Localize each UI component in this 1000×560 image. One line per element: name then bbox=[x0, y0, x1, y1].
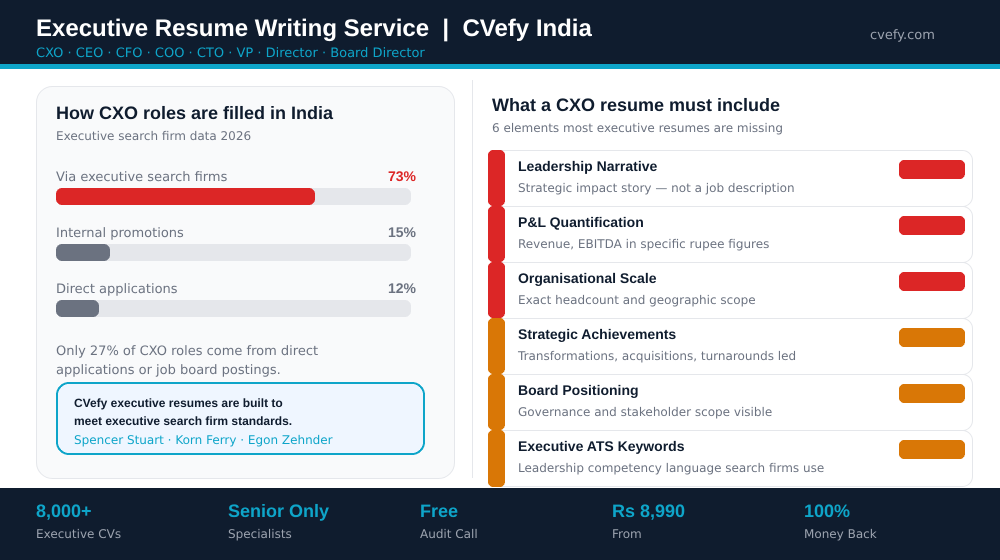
row: Organisational Scale bbox=[488, 262, 972, 318]
callout bbox=[57, 383, 424, 454]
row: Strategic Achievements bbox=[488, 318, 972, 374]
stat: executive CVs bbox=[36, 501, 121, 541]
stat: executive CVs: Executive CVs bbox=[36, 527, 121, 541]
callout: Spencer Stuart · Korn Ferry · Egon Zehnder bbox=[74, 433, 333, 447]
note text bbox=[56, 344, 318, 378]
row: Leadership Narrative bbox=[488, 150, 972, 206]
panel heading: How CXO roles are filled in India bbox=[56, 103, 334, 123]
title: Executive Resume Writing Service | CVefy India bbox=[36, 15, 592, 42]
row: Organisational Scale: Organisational Scale bbox=[518, 270, 657, 286]
stat: money back: Money Back bbox=[804, 527, 877, 541]
right subheading: 6 elements most executive resumes are missing bbox=[492, 121, 783, 135]
bar: executive search firms: 73% bbox=[388, 168, 417, 184]
stat: senior only bbox=[228, 501, 329, 541]
stat: free audit call: Audit Call bbox=[420, 527, 478, 541]
stat: free audit call bbox=[420, 501, 478, 541]
stat: executive CVs: 8,000+ bbox=[36, 501, 92, 521]
row: Organisational Scale: Exact headcount and geographic scope bbox=[518, 293, 756, 307]
row: Leadership Narrative: Strategic impact story — not a job description bbox=[518, 181, 795, 195]
row: Strategic Achievements: Strategic Achievements bbox=[518, 326, 676, 342]
panel: how CXO roles are filled bbox=[36, 86, 454, 478]
bar: internal promotions: Internal promotions bbox=[56, 226, 184, 241]
role list subtitle: CXO · CEO · CFO · COO · CTO · VP · Director · Board Director bbox=[36, 46, 425, 61]
bar: executive search firms: Via executive search firms bbox=[56, 170, 228, 185]
site url: cvefy.com bbox=[870, 28, 935, 43]
row: P&L Quantification: P&L Quantification bbox=[518, 214, 644, 230]
header band bbox=[0, 0, 1000, 69]
stat: money back bbox=[804, 501, 877, 541]
bar: direct applications: Direct applications bbox=[56, 282, 178, 297]
stat: price bbox=[612, 501, 685, 541]
bar: direct applications bbox=[56, 280, 417, 317]
row: P&L Quantification: Revenue, EBITDA in specific rupee figures bbox=[518, 237, 769, 251]
stat: price: Rs 8,990 bbox=[612, 501, 685, 521]
row: Board Positioning: Board Positioning bbox=[518, 382, 639, 398]
bar: direct applications: 12% bbox=[388, 280, 417, 296]
row: Board Positioning bbox=[488, 374, 972, 430]
stat: money back: 100% bbox=[804, 501, 850, 521]
row: P&L Quantification bbox=[488, 206, 972, 262]
stat: senior only: Senior Only bbox=[228, 501, 329, 521]
callout: meet executive search firm standards. bbox=[74, 414, 292, 428]
stat: price: From bbox=[612, 527, 642, 541]
right heading: What a CXO resume must include bbox=[492, 95, 780, 115]
bar: internal promotions bbox=[56, 224, 417, 261]
row: Strategic Achievements: Transformations, acquisitions, turnarounds led bbox=[517, 349, 796, 363]
callout: CVefy executive resumes are built to bbox=[74, 396, 283, 410]
row: Leadership Narrative: Leadership Narrative bbox=[518, 158, 657, 174]
row: Board Positioning: Governance and stakeholder scope visible bbox=[518, 405, 772, 419]
note text: Only 27% of CXO roles come from direct bbox=[56, 344, 318, 359]
row: Executive ATS Keywords: Leadership competency language search firms use bbox=[518, 461, 824, 475]
panel subheading: Executive search firm data 2026 bbox=[56, 129, 251, 143]
stat: senior only: Specialists bbox=[228, 527, 292, 541]
bar: executive search firms bbox=[56, 168, 417, 205]
note text: applications or job board postings. bbox=[56, 363, 281, 378]
bar: internal promotions: 15% bbox=[388, 224, 417, 240]
footer band bbox=[0, 488, 1000, 560]
row: Executive ATS Keywords bbox=[488, 430, 972, 487]
row: Executive ATS Keywords: Executive ATS Keywords bbox=[518, 438, 685, 454]
stat: free audit call: Free bbox=[420, 501, 458, 521]
